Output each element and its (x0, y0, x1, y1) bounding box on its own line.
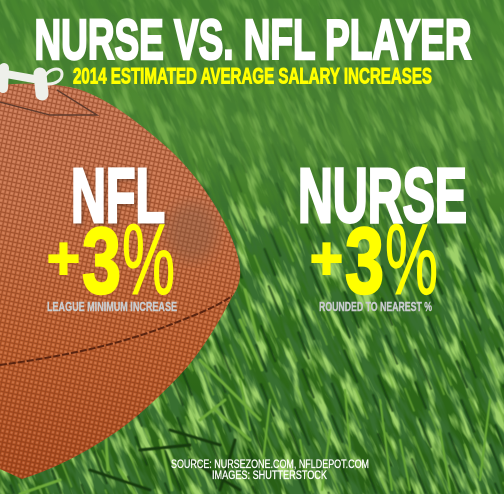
NFL heading: NFL (71, 153, 165, 239)
nurse number 3: 3 (345, 208, 384, 313)
nurse caption: ROUNDED TO NEAREST % (319, 300, 432, 314)
nurse percent sign: % (385, 204, 438, 316)
football (0, 63, 240, 479)
NFL caption: LEAGUE MINIMUM INCREASE (47, 300, 177, 314)
NFL percent sign: % (122, 204, 175, 316)
panel: nurse stat (298, 153, 467, 316)
ball pebbled leather texture (0, 84, 240, 479)
NFL plus sign: + (47, 225, 80, 292)
source credit: SOURCE: NURSEZONE.COM, NFLDEPOT.COM (171, 459, 369, 471)
ball lower seam stitching (0, 296, 232, 365)
source credit (171, 459, 369, 482)
ball worn patch (166, 202, 218, 262)
panel: NFL stat (47, 153, 177, 316)
source credit: IMAGES: SHUTTERSTOCK (212, 470, 327, 482)
laces (0, 68, 62, 94)
NFL number 3: 3 (82, 208, 121, 313)
nurse plus sign: + (310, 225, 343, 292)
lace panel stitching (0, 90, 97, 115)
